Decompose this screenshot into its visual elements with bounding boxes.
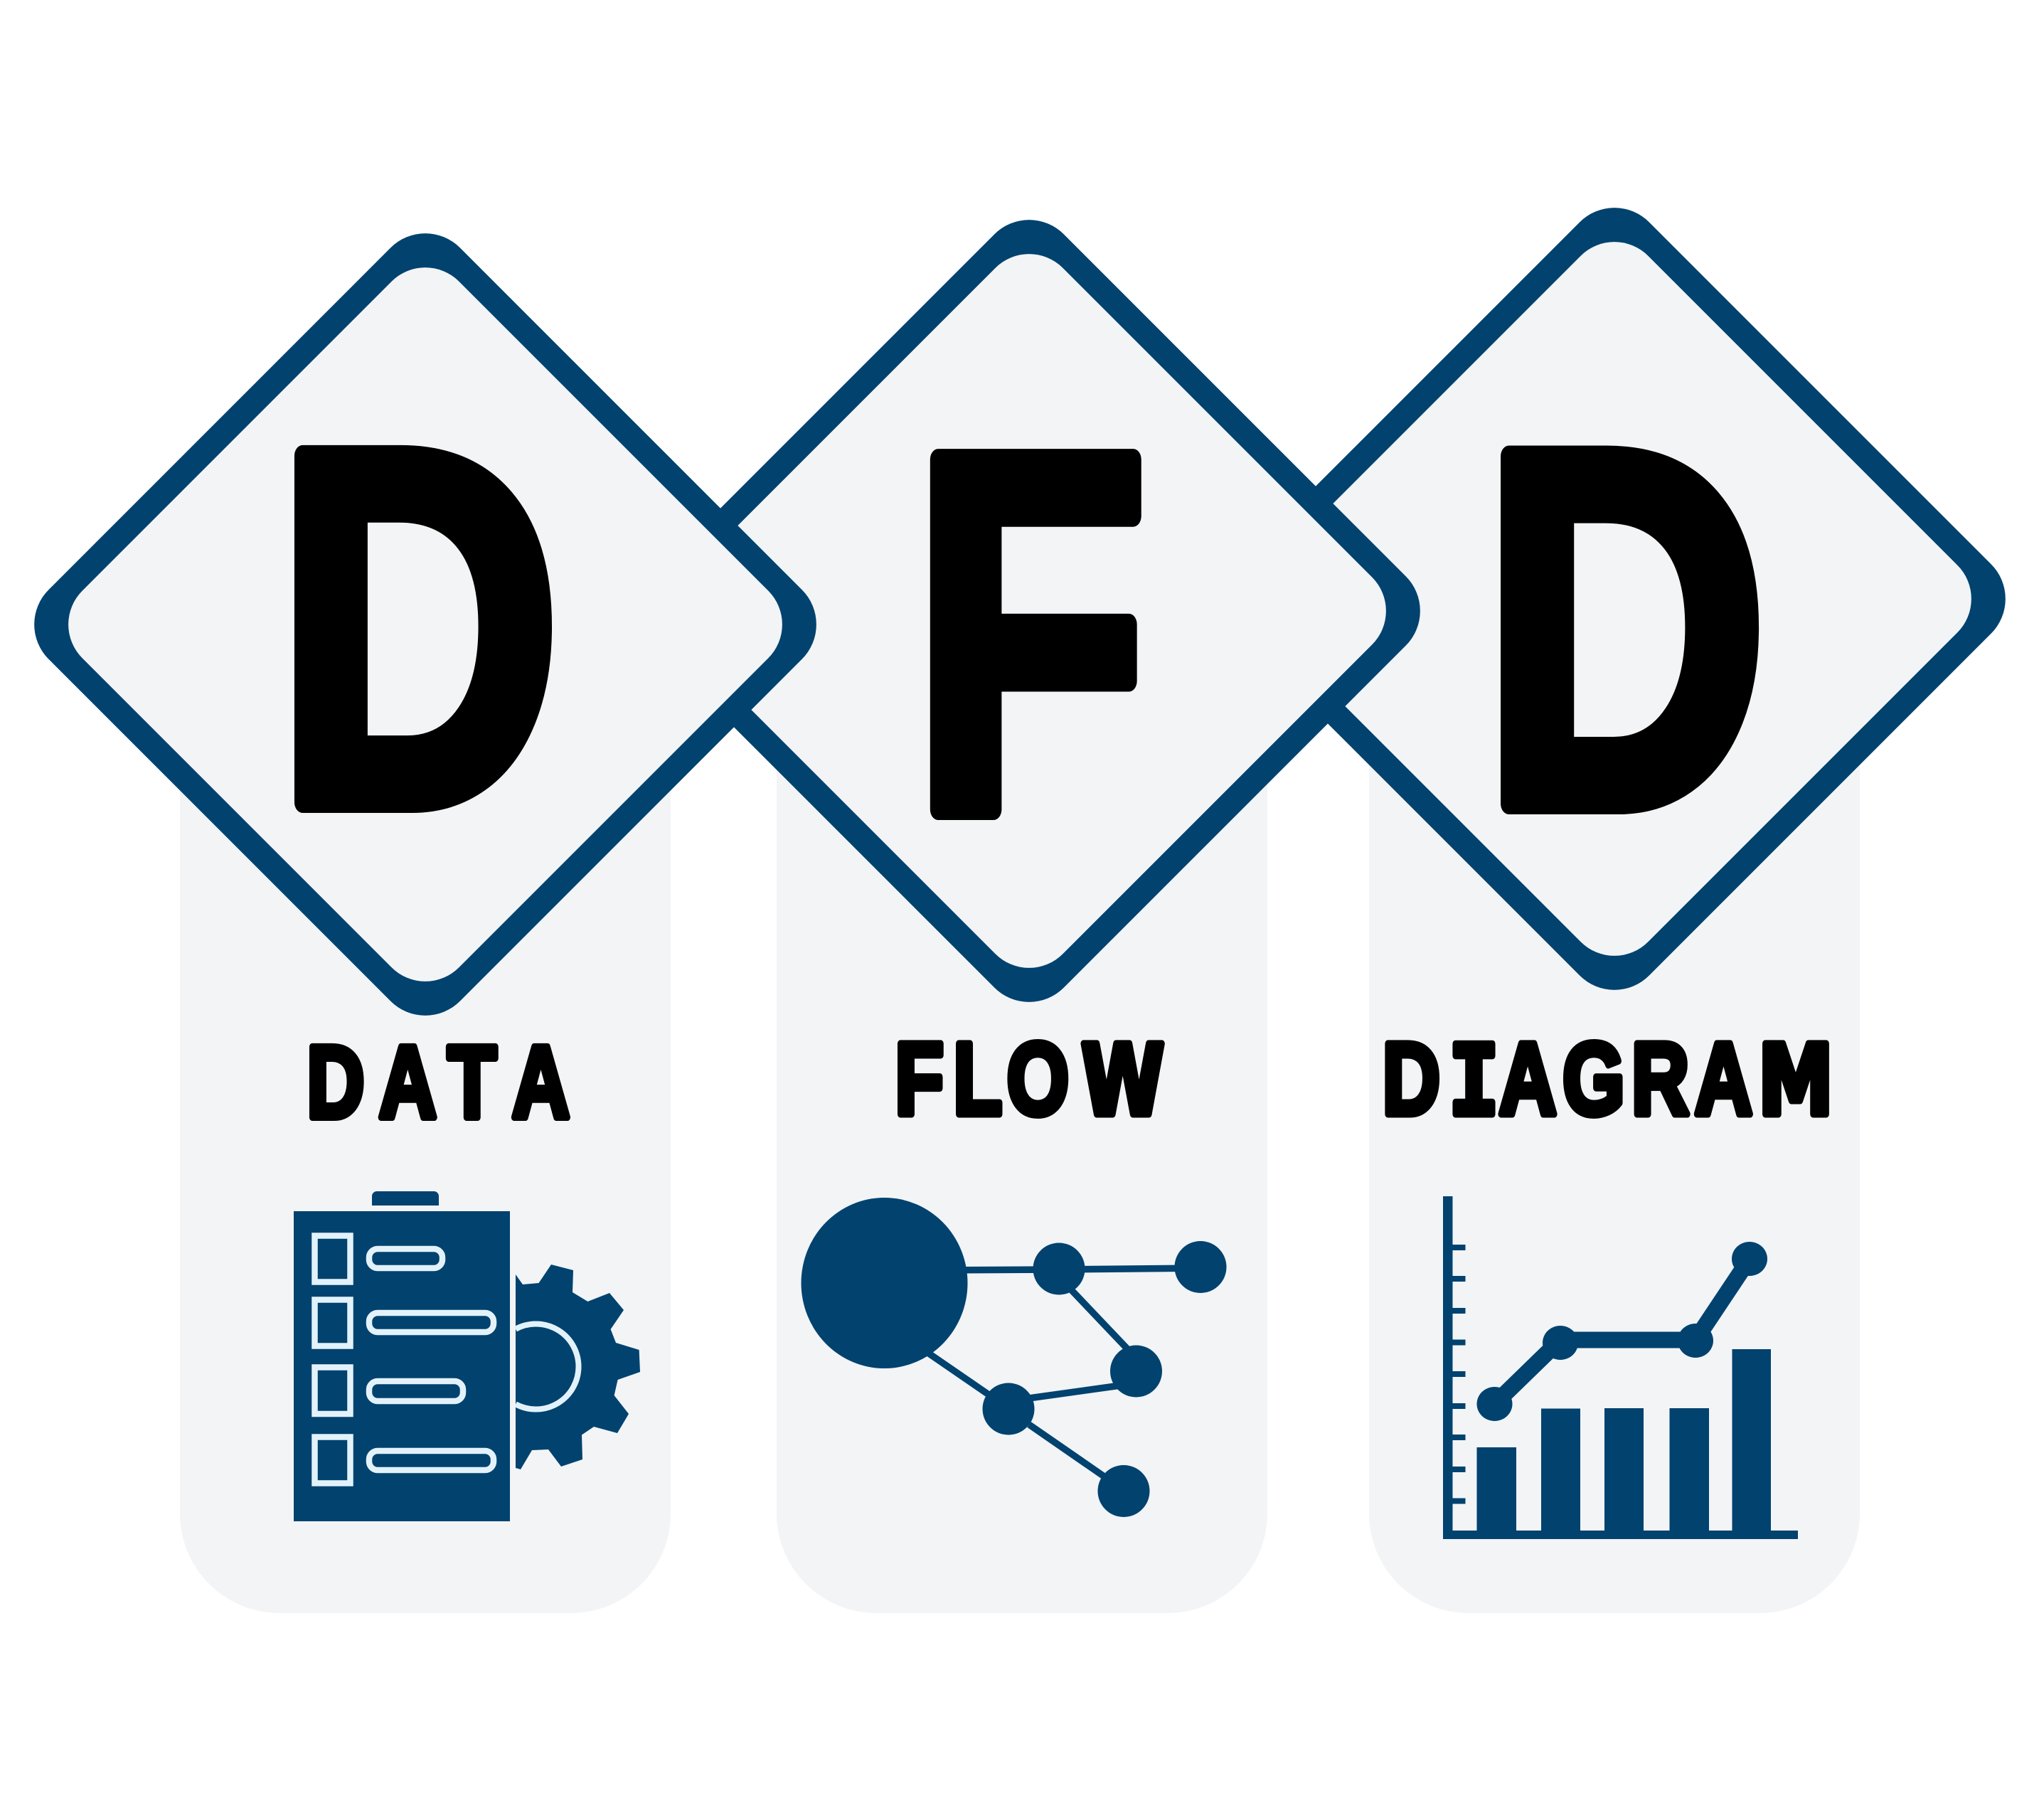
large letter D (data): D (277, 346, 560, 910)
large letter F: F (912, 350, 1147, 917)
chart trend line (1476, 1242, 1767, 1421)
icon: checklist clipboard with gear (294, 1191, 640, 1521)
heading: DATA: DATA (307, 1026, 570, 1139)
diamond: letter D of diagram (1203, 188, 2025, 1010)
panel: flow (777, 640, 1267, 1613)
large letter D (diagram): D (1483, 347, 1767, 911)
heading: FLOW: FLOW (895, 1022, 1164, 1137)
icon: gear (516, 1265, 640, 1469)
icon: network flow nodes (801, 1198, 1226, 1517)
chart bars (1476, 1349, 1771, 1533)
icon: clipboard clip (372, 1191, 439, 1206)
checklist rows (314, 1236, 494, 1484)
icon: clipboard board (294, 1211, 510, 1521)
diamond: letter D of data (14, 213, 836, 1036)
heading: DIAGRAM: DIAGRAM (1383, 1022, 1833, 1146)
panel: diagram (1369, 640, 1860, 1613)
chart axes and ticks (1443, 1196, 1798, 1539)
chart: bars with trend line (1443, 1196, 1798, 1539)
diamond: letter F (618, 200, 1440, 1022)
panel: data (180, 640, 671, 1613)
